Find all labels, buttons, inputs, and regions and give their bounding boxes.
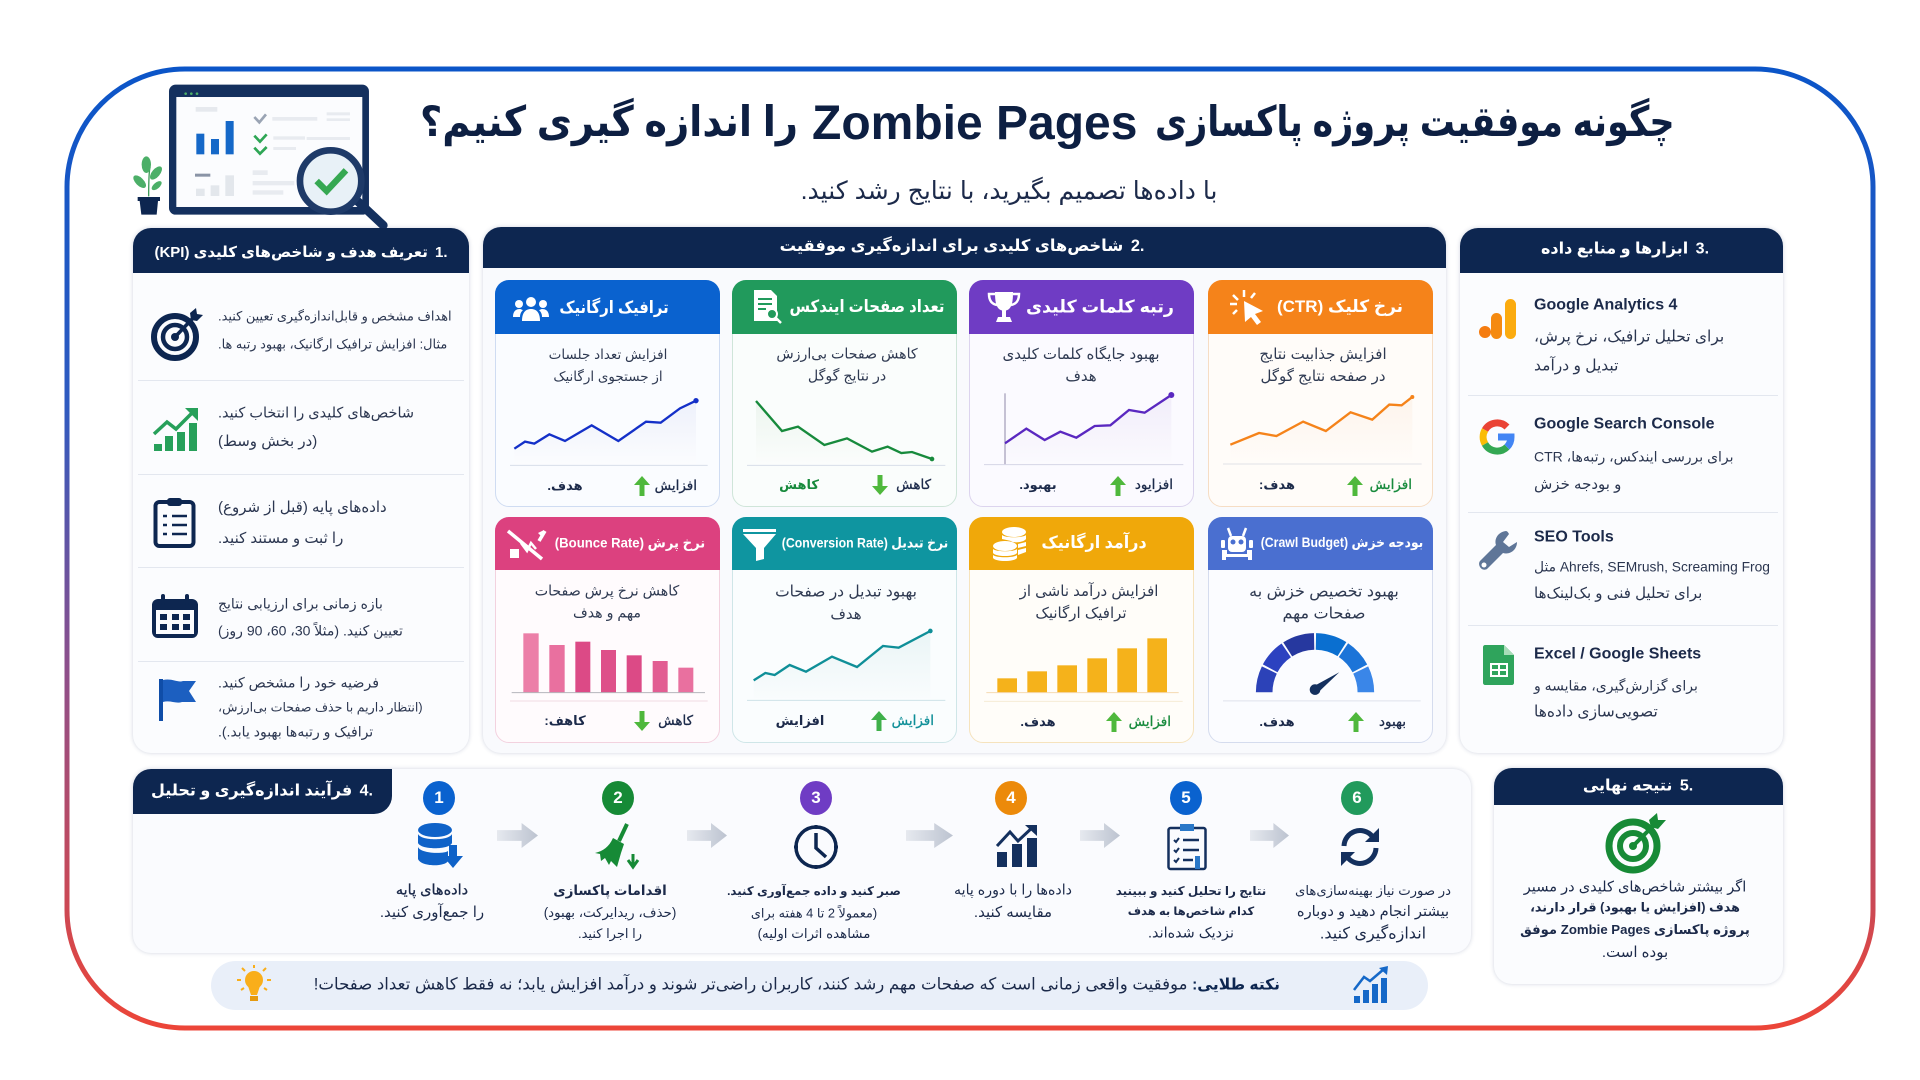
card footer — [776, 711, 934, 731]
card description: بهبود تخصیص خزش به — [1249, 583, 1399, 600]
gauge: crawl budget — [1223, 633, 1421, 702]
card header: keyword ranking — [969, 280, 1194, 334]
step 4 text: مقایسه کنید. — [974, 904, 1052, 921]
card description — [535, 583, 680, 621]
icon: broom — [595, 823, 641, 869]
step 1 text: را جمع‌آوری کنید. — [380, 904, 484, 921]
bar chart: falling bounce rate — [510, 633, 708, 702]
card description: کاهش نرخ پرش صفحات — [535, 583, 679, 599]
card header: bounce rate — [495, 517, 720, 570]
step 6 text: اندازه‌گیری کنید. — [1320, 925, 1426, 942]
card description: مهم و هدف — [573, 605, 641, 621]
text: hypothesis — [218, 675, 423, 740]
panel 5 heading — [1494, 768, 1783, 805]
card description: بهبود تبدیل در صفحات — [775, 584, 917, 601]
text: goals: مثال: افزایش ترافیک ارگانیک، بهبود رتبه ها. — [218, 336, 447, 351]
step 1 — [358, 779, 508, 947]
step 6 text: در صورت نیاز بهینه‌سازی‌های — [1295, 883, 1451, 898]
card description: در صفحه نتایج گوگل — [1260, 368, 1386, 385]
line chart: rising ranking — [984, 392, 1184, 466]
card footer: هدف. — [1020, 714, 1056, 729]
card header: conversion rate — [732, 517, 957, 570]
card footer: افزایش — [776, 713, 824, 728]
step 3 — [715, 779, 915, 947]
arrow 4 to 5 — [1080, 823, 1120, 848]
icon: clock — [793, 824, 839, 870]
card footer: بهبود — [1379, 714, 1406, 729]
step 5 text: نتایج را تحلیل کنید و ببینید — [1116, 884, 1266, 898]
card: click-through rate — [1208, 280, 1433, 507]
title: Zombie Pages — [812, 97, 1137, 150]
card: bounce rate — [495, 517, 720, 743]
step 4 text: داده‌ها را با دوره پایه — [954, 882, 1072, 898]
card header: bounce rate: نرخ پرش (Bounce Rate) — [555, 535, 705, 551]
tool: Excel and Google Sheets: تصویی‌سازی داده‌ها — [1534, 704, 1658, 721]
step 3 text: (معمولاً 2 تا 4 هفته برای — [751, 905, 877, 920]
text: baseline data: را ثبت و مستند کنید. — [218, 530, 343, 547]
step 2 number: 2 — [613, 788, 623, 807]
panel 5 heading: 5. نتیجه نهایی — [1583, 777, 1693, 794]
card header: crawl budget: بودجه خزش (Crawl Budget) — [1261, 535, 1423, 550]
card footer: افزایش — [1370, 477, 1412, 492]
card footer: افزایود — [1135, 477, 1173, 492]
tool: SEO tools: SEO Tools — [1534, 528, 1614, 545]
card header: CTR: نرخ کلیک (CTR) — [1277, 297, 1403, 316]
line chart: rising traffic — [510, 398, 708, 466]
step 5 number: 5 — [1181, 788, 1191, 807]
tool: Google Search Console: برای بررسی ایندکس، رتبه‌ها، CTR — [1534, 449, 1734, 465]
card footer: هدف. — [1259, 714, 1295, 729]
card footer — [544, 711, 694, 731]
icon: Google G — [1480, 419, 1514, 455]
card footer: هدف. — [547, 478, 583, 493]
step 4 number — [995, 781, 1027, 815]
card header: keyword ranking: رتبه کلمات کلیدی — [1026, 296, 1174, 316]
panel 2 heading: 2. شاخص‌های کلیدی برای اندازه‌گیری موفقیت — [780, 237, 1144, 255]
bar chart: rising revenue — [984, 638, 1183, 702]
icon: checklist — [1167, 823, 1207, 871]
tip text: نکته طلایی: موفقیت واقعی زمانی است که صفحات مهم رشد کنند، کاربران راضی‌تر شوند و درآمد افزایش یابد؛ نه فقط کاهش تعداد صفحات! — [314, 975, 1280, 994]
step 3 text — [715, 879, 915, 945]
card description — [1259, 346, 1387, 385]
text: select KPIs — [218, 405, 414, 450]
tool: SEO tools: مثل Ahrefs, SEMrush, Screaming Frog — [1534, 560, 1770, 575]
tool: Google Search Console: Google Search Console — [1534, 415, 1714, 432]
step 5 number — [1170, 781, 1202, 815]
text: hypothesis: ترافیک و رتبه‌ها بهبود یابد.). — [218, 724, 373, 740]
text: time frame — [218, 596, 403, 639]
icon: Google Sheets — [1483, 645, 1515, 685]
golden tip bar — [211, 961, 1428, 1010]
icon: Google Analytics — [1479, 299, 1516, 339]
tool: Google Search Console: و بودجه خزش — [1534, 476, 1621, 493]
card footer — [1019, 476, 1173, 496]
step 4 number: 4 — [1006, 788, 1016, 807]
card description — [1002, 346, 1160, 385]
card footer — [1020, 712, 1171, 732]
card: conversion rate — [732, 517, 957, 743]
card description — [775, 584, 917, 623]
line chart: rising CTR — [1223, 395, 1422, 464]
step 3 number — [800, 781, 832, 815]
card footer: کاهش — [779, 477, 819, 492]
card header: crawl budget — [1208, 517, 1433, 570]
text: baseline data — [218, 499, 387, 547]
step 4 text — [943, 879, 1083, 923]
card header: conversion rate: نرخ تبدیل (Conversion Rate) — [782, 535, 948, 551]
card description: در نتایج گوگل — [808, 368, 886, 384]
step 6 text: بیشتر انجام دهید و دوباره — [1297, 904, 1449, 920]
card footer: کاهش — [896, 477, 931, 492]
text: time frame: بازه زمانی برای ارزیابی نتایج — [218, 596, 383, 612]
text: hypothesis: فرضیه خود را مشخص کنید. — [218, 675, 379, 691]
result text — [1504, 876, 1774, 976]
step 5 text: نزدیک شده‌اند. — [1148, 925, 1234, 941]
card description: بهبود جایگاه کلمات کلیدی — [1002, 346, 1160, 363]
panel 5: final result — [1494, 768, 1783, 984]
text: hypothesis: (انتظار داریم با حذف صفحات بی‌ارزش، — [218, 700, 423, 714]
tool: Excel and Google Sheets: Excel / Google Sheets — [1534, 645, 1701, 662]
tool: Excel and Google Sheets — [1534, 642, 1779, 726]
card: organic traffic — [495, 280, 720, 507]
icon: flag — [159, 679, 196, 721]
step 3 text: مشاهده اثرات اولیه) — [758, 926, 870, 941]
card header: indexed pages: تعداد صفحات ایندکس — [790, 297, 944, 316]
card description: هدف — [1065, 368, 1097, 385]
arrow 3 to 4 — [906, 823, 953, 848]
result text: بوده است. — [1602, 944, 1668, 961]
card description: افزایش درآمد ناشی از — [1020, 583, 1158, 600]
step 2 text: را اجرا کنید. — [578, 926, 642, 941]
card header: organic revenue — [969, 517, 1194, 570]
icon: green target — [1605, 812, 1669, 874]
card description: کاهش صفحات بی‌ارزش — [776, 346, 918, 362]
card description — [1249, 583, 1399, 622]
card header: organic traffic: ترافیک ارگانیک — [559, 298, 669, 317]
icon: wrench — [1478, 530, 1518, 572]
card header: organic traffic — [495, 280, 720, 334]
panel 1: goal and KPI definition — [133, 228, 469, 753]
illustration: dashboard monitor with magnifier and plant — [133, 84, 388, 228]
card description — [549, 347, 667, 384]
step 6 — [1283, 779, 1463, 947]
card description: صفحات مهم — [1283, 605, 1365, 622]
card header: indexed pages — [732, 280, 957, 334]
step 5 text: کدام شاخص‌ها به هدف — [1128, 906, 1254, 918]
panel 3: tools and data sources — [1460, 228, 1783, 753]
text: goals: اهداف مشخص و قابل‌اندازه‌گیری تعیین کنید. — [218, 308, 452, 323]
card footer: افزایش — [892, 713, 934, 728]
result text: اگر بیشتر شاخص‌های کلیدی در مسیر — [1524, 879, 1746, 895]
icon: refresh — [1339, 826, 1381, 868]
tool: SEO tools — [1534, 525, 1779, 607]
card: indexed pages — [732, 280, 957, 507]
tool: Google Analytics 4 — [1534, 296, 1724, 375]
card footer — [779, 475, 932, 495]
tool: Google Analytics 4: برای تحلیل ترافیک، نرخ پرش، — [1534, 329, 1724, 346]
card: organic revenue — [969, 517, 1194, 743]
result text: هدف (افزایش یا بهبود) قرار دارند، — [1530, 900, 1740, 914]
icon: growth chart — [1353, 966, 1389, 1004]
tool: SEO tools: برای تحلیل فنی و بک‌لینک‌ها — [1534, 585, 1702, 602]
panel 1 heading — [133, 228, 469, 273]
icon: clipboard — [154, 498, 196, 548]
card footer: هدف: — [1259, 477, 1295, 492]
tool: Excel and Google Sheets: برای گزارش‌گیری، مقایسه و — [1534, 678, 1698, 694]
step 6 number: 6 — [1352, 788, 1362, 807]
panel 3 heading — [1460, 228, 1783, 273]
panel 4 heading — [133, 769, 392, 814]
card header: organic revenue: درآمد ارگانیک — [1041, 533, 1147, 552]
card footer: افزایش — [655, 478, 697, 493]
step 3 number: 3 — [811, 788, 821, 807]
step 2 text: (حذف، ریدایرکت، بهبود) — [544, 905, 676, 920]
text: select KPIs: (در بخش وسط) — [218, 433, 317, 450]
text: baseline data: داده‌های پایه (قبل از شروع) — [218, 499, 387, 516]
arrow 5 to 6 — [1250, 823, 1289, 848]
card description: از جستجوی ارگانیک — [553, 369, 663, 384]
step 1 number: 1 — [434, 788, 444, 807]
icon: target — [151, 308, 203, 361]
tool: Google Search Console — [1534, 415, 1734, 493]
text: select KPIs: شاخص‌های کلیدی را انتخاب کنید. — [218, 405, 414, 421]
title: را اندازه گیری کنیم؟ — [420, 98, 798, 145]
panel 2 heading — [483, 227, 1446, 268]
step 5 text — [1105, 879, 1275, 945]
card footer: کاهش — [658, 713, 693, 728]
card footer — [1259, 476, 1412, 496]
result text: پروژه پاکسازی Zombie Pages موفق — [1520, 922, 1750, 937]
step 1 number — [423, 781, 455, 815]
card footer — [547, 476, 697, 496]
card footer — [1259, 712, 1406, 732]
card description: ترافیک ارگانیک — [1035, 605, 1127, 622]
card footer: بهبود. — [1019, 477, 1057, 492]
step 6 text — [1283, 879, 1463, 945]
panel 1 heading: 1. تعریف هدف و شاخص‌های کلیدی (KPI) — [154, 244, 448, 261]
panel 4: measurement and analysis process — [133, 769, 1471, 953]
step 5 — [1105, 779, 1275, 947]
card description: افزایش تعداد جلسات — [549, 347, 667, 362]
card description: هدف — [830, 606, 862, 623]
card description — [776, 346, 918, 384]
step 4 — [943, 779, 1083, 947]
arrow 1 to 2 — [497, 823, 538, 848]
title: چگونه موفقیت پروژه پاکسازی — [1155, 98, 1675, 145]
step 1 text: داده‌های پایه — [396, 882, 468, 898]
step 2 text: اقدامات پاکسازی — [553, 883, 667, 898]
icon: growth bars — [996, 824, 1038, 868]
text: time frame: تعیین کنید. (مثلاً 30، 60، 90 روز) — [218, 623, 403, 639]
step 6 number — [1341, 781, 1373, 815]
card description: افزایش جذابیت نتایج — [1259, 346, 1387, 363]
step 2 number — [602, 781, 634, 815]
arrow 2 to 3 — [687, 823, 727, 848]
panel 3 heading: 3. ابزارها و منابع داده — [1541, 240, 1709, 257]
icon: calendar — [152, 594, 198, 638]
step 2 text — [537, 879, 697, 945]
step 3 text: صبر کنید و داده جمع‌آوری کنید. — [727, 884, 901, 898]
card header: CTR — [1208, 280, 1433, 334]
icon: green growth chart — [152, 408, 198, 451]
title — [420, 97, 1675, 150]
line chart: falling pages — [747, 400, 946, 466]
text: goals — [218, 308, 452, 352]
tool: Google Analytics 4: تبدیل و درآمد — [1534, 358, 1618, 375]
card: keyword ranking — [969, 280, 1194, 507]
card footer: کاهف: — [544, 713, 586, 728]
panel 4 heading: 4. فرآیند اندازه‌گیری و تحلیل — [151, 782, 373, 799]
line chart: rising conversions — [747, 628, 946, 701]
tool: Google Analytics 4: Google Analytics 4 — [1534, 296, 1677, 313]
subtitle: با داده‌ها تصمیم بگیرید، با نتایج رشد کنید. — [801, 177, 1217, 205]
card description — [1019, 582, 1158, 622]
panel 2: key success metrics — [483, 227, 1446, 753]
card: crawl budget — [1208, 517, 1433, 743]
step 2 — [537, 779, 697, 947]
icon: database — [417, 823, 463, 869]
icon: light bulb — [237, 965, 271, 1005]
card footer: افزایش — [1129, 714, 1171, 729]
step 1 text — [358, 879, 508, 923]
